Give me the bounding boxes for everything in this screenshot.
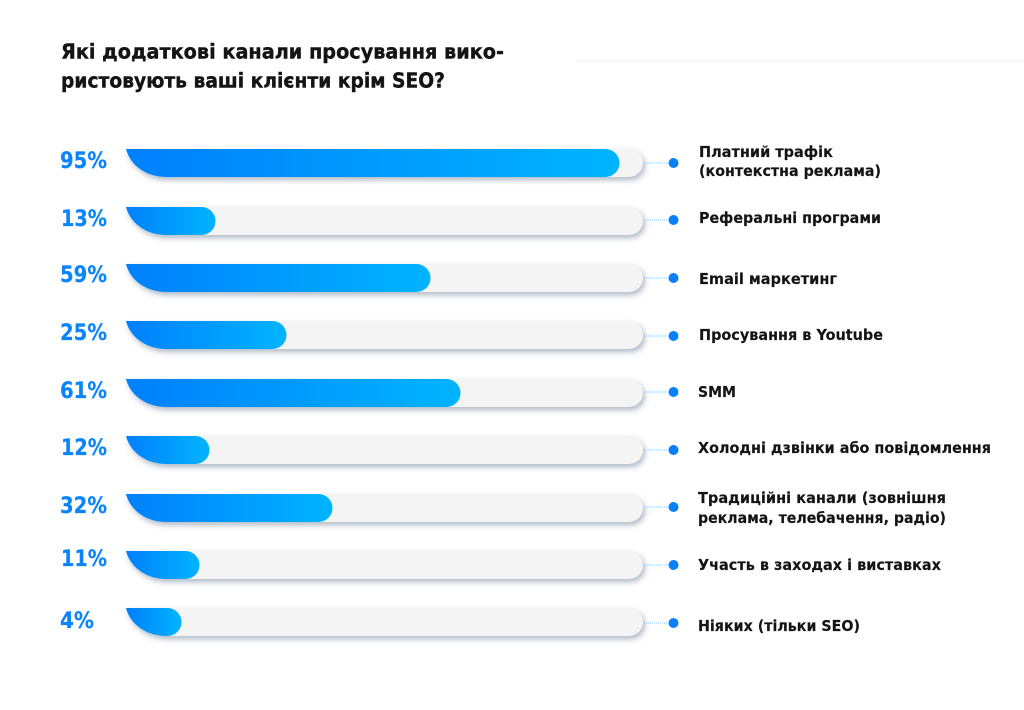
label: paid traffic: Платний трафік [699,143,833,161]
value 25%: 25% [60,321,107,346]
label: youtube: Просування в Youtube [699,326,883,344]
row: 4% none [126,608,678,636]
label: cold calls: Холодні дзвінки або повідомлення [698,439,991,457]
title: Які додаткові канали просування вико- [61,40,504,64]
label: email: Email маркетинг [699,270,837,288]
label: traditional: Традиційні канали (зовнішня [698,489,946,507]
row: 12% cold calls [126,436,678,464]
label: paid traffic: (контекстна реклама) [699,162,881,180]
row: 13% referral [126,207,678,235]
value 4%: 4% [60,609,94,634]
value 61%: 61% [60,379,107,404]
value 13%: 13% [61,207,107,232]
label: traditional: реклама, телебачення, радіо) [698,509,946,527]
row: 95% paid traffic [126,149,678,177]
value 59%: 59% [60,263,107,288]
row: 32% traditional [126,494,678,522]
label: smm: SMM [698,383,736,401]
row: 25% youtube [126,321,678,349]
value 11%: 11% [61,547,107,572]
row: 59% email [126,264,678,292]
value 12%: 12% [61,436,107,461]
value 32%: 32% [60,494,107,519]
label: referral: Реферальні програми [699,209,881,227]
title: ристовують ваші клієнти крім SEO? [61,68,445,92]
value 95%: 95% [60,149,107,174]
row: 61% smm [126,379,678,407]
header rule [576,60,1024,63]
label: events: Участь в заходах і виставках [698,556,941,574]
label: none: Ніяких (тільки SEO) [698,617,860,635]
row: 11% events [126,551,678,579]
